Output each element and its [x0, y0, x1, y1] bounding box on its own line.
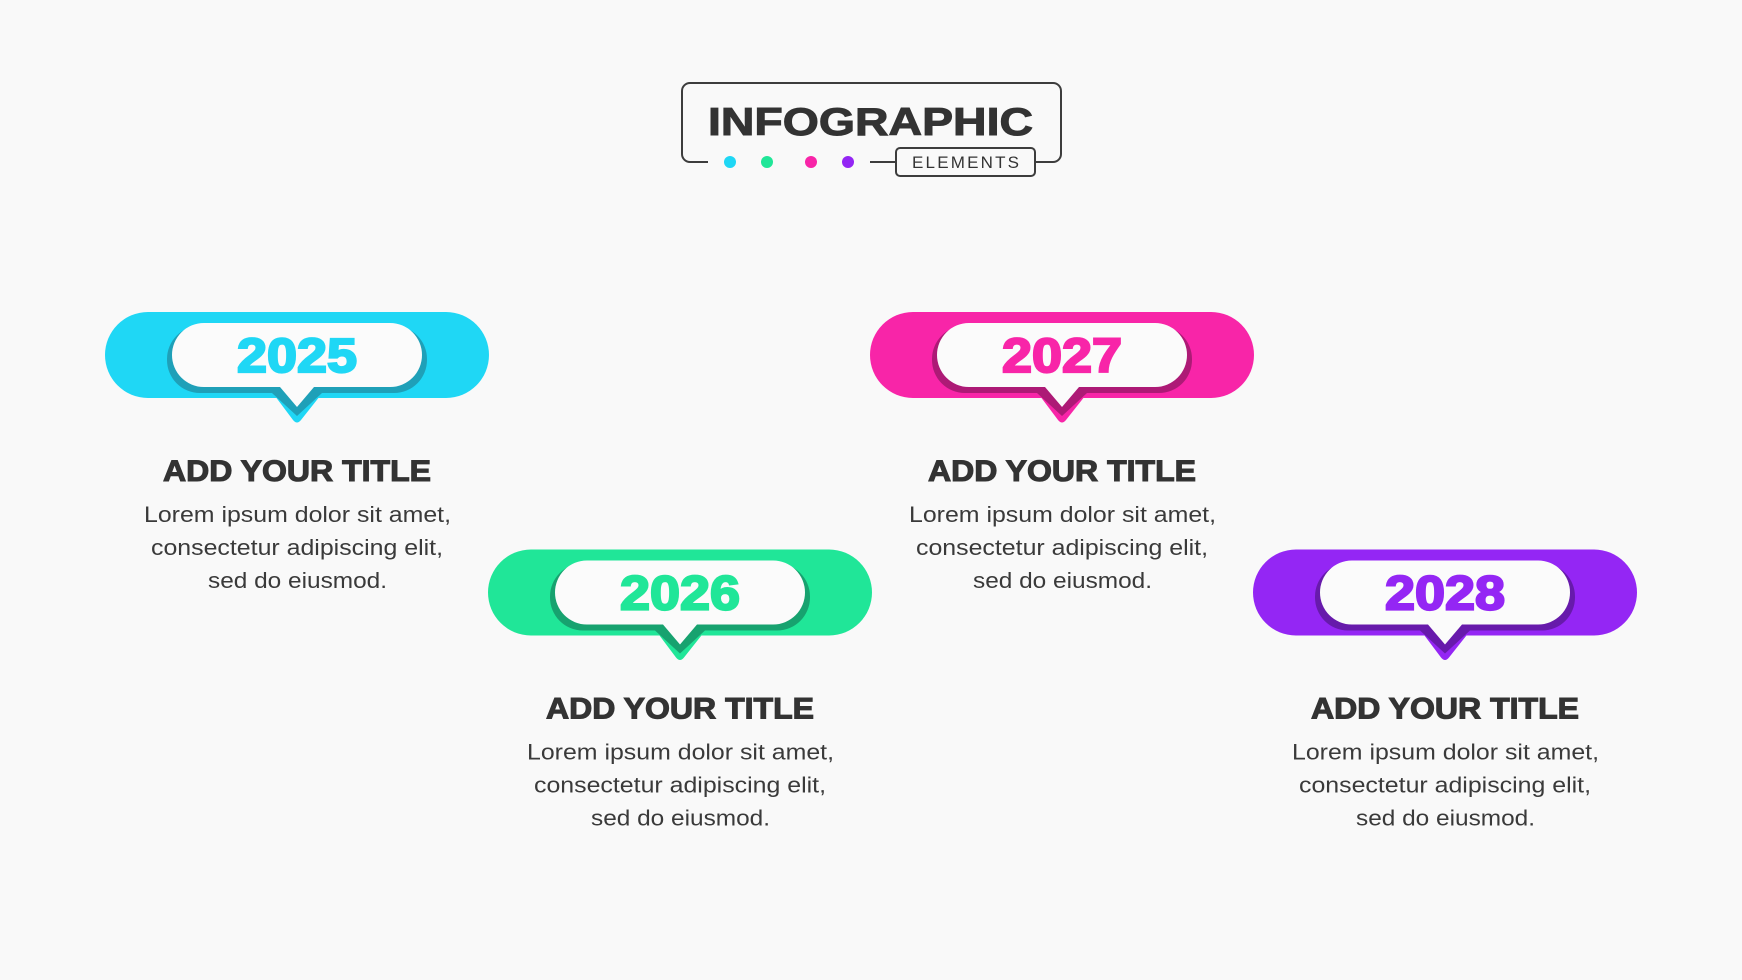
body text: Lorem ipsum dolor sit amet,	[909, 502, 1216, 527]
body text: consectetur adipiscing elit,	[534, 772, 826, 798]
year pill 2025	[105, 312, 489, 422]
heading: ADD YOUR TITLE	[1311, 692, 1579, 726]
body text: sed do eiusmod.	[1356, 806, 1535, 830]
body text	[1292, 740, 1599, 830]
year pill 2027: 2027	[1002, 330, 1122, 383]
body text: Lorem ipsum dolor sit amet,	[527, 740, 834, 764]
year pill 2028: 2028	[1385, 568, 1505, 620]
header: infographic elements badge	[682, 83, 1061, 176]
title: INFOGRAPHIC: INFOGRAPHIC	[708, 101, 1033, 144]
body text: Lorem ipsum dolor sit amet,	[1292, 740, 1599, 764]
elements tag: ELEMENTS	[912, 153, 1019, 172]
header frame	[682, 83, 1061, 162]
body text: consectetur adipiscing elit,	[1299, 772, 1591, 798]
panel: 2026	[488, 550, 872, 830]
year pill 2028	[1253, 550, 1637, 660]
year pill 2025: 2025	[237, 330, 357, 383]
body text	[527, 740, 834, 830]
year pill 2026	[488, 550, 872, 660]
body text: consectetur adipiscing elit,	[151, 535, 443, 560]
heading: ADD YOUR TITLE	[928, 455, 1196, 488]
body text: Lorem ipsum dolor sit amet,	[144, 502, 451, 527]
heading: ADD YOUR TITLE	[163, 455, 431, 488]
heading: ADD YOUR TITLE	[546, 692, 814, 726]
panel: 2027	[870, 312, 1254, 593]
body text: sed do eiusmod.	[591, 806, 770, 830]
body text	[144, 502, 451, 593]
colour dots	[724, 156, 854, 168]
year pill 2026: 2026	[620, 568, 740, 620]
body text: consectetur adipiscing elit,	[916, 535, 1208, 560]
body text: sed do eiusmod.	[973, 568, 1152, 593]
panel: 2028	[1253, 550, 1637, 830]
year pill 2027	[870, 312, 1254, 422]
elements tag	[896, 148, 1035, 176]
panel: 2025	[105, 312, 489, 593]
body text: sed do eiusmod.	[208, 568, 387, 593]
body text	[909, 502, 1216, 593]
